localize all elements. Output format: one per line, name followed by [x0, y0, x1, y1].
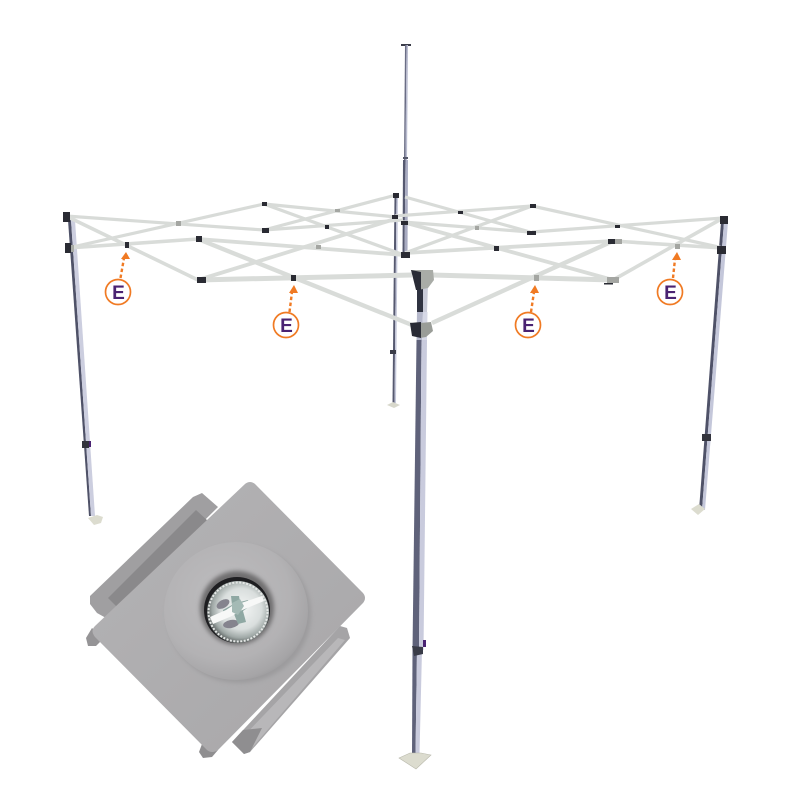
right pole: [691, 222, 728, 515]
callout E: far right: [658, 252, 682, 304]
frame joints: [63, 193, 728, 284]
detail: plastic bracket with screw: [86, 482, 365, 758]
bracket lower tab: [199, 744, 218, 758]
bracket rear wing, upper left: [90, 493, 218, 618]
callout E: far left: E: [112, 283, 125, 304]
bracket main plate: [92, 482, 365, 752]
center mast: [401, 44, 411, 258]
front pole: [399, 270, 434, 769]
callout E: centre right: E: [522, 316, 535, 337]
callout E: far left: [106, 252, 130, 304]
top corner bracket: [411, 270, 434, 290]
left pole: [68, 220, 103, 525]
bracket hole: [200, 571, 274, 645]
callout E: centre left: E: [280, 316, 293, 337]
lower corner bracket: [420, 322, 433, 338]
callout E: centre right: [516, 285, 540, 338]
callout E: far right: E: [664, 283, 677, 304]
screw head: [207, 581, 269, 643]
roof truss, front members: [66, 216, 723, 325]
bracket left tab: [86, 628, 104, 646]
bracket raised ring: [164, 542, 311, 683]
roof truss, rear members: [66, 195, 723, 255]
callout E: centre left: [274, 285, 298, 338]
bracket rear wing, lower right: [232, 626, 350, 754]
back pole: [387, 195, 400, 408]
